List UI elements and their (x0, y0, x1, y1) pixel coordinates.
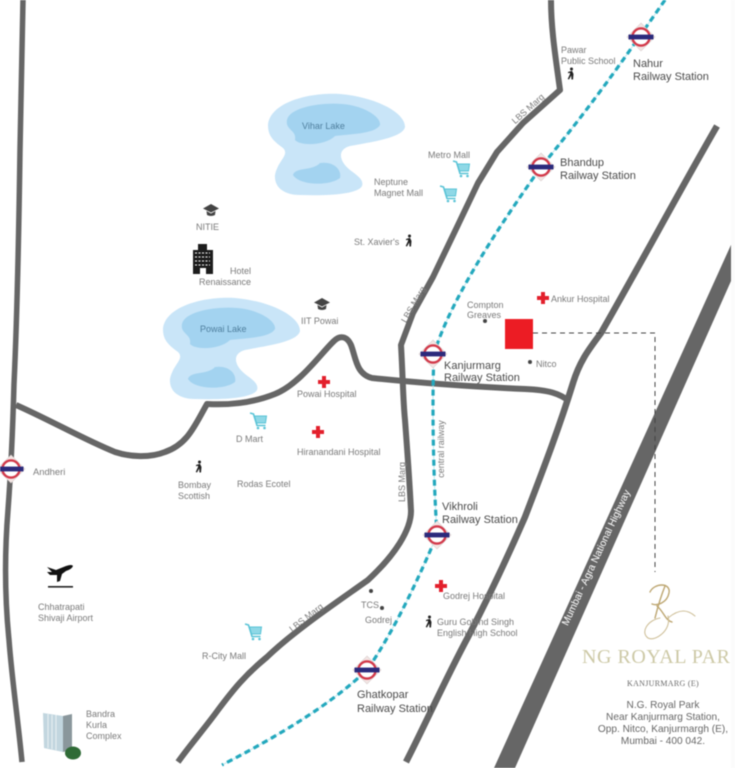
station: Bhandup: Bhandup (560, 157, 604, 169)
landmark: Bombay Scottish (178, 460, 212, 501)
lake label: Powai: Powai Lake (200, 324, 247, 334)
road: LBS Marg (178, 0, 560, 762)
road labels: central railway (436, 420, 446, 478)
project address: Near Kanjurmarg Station, (606, 712, 720, 723)
landmark: Hotel Renaissance: Renaissance (199, 277, 251, 287)
road: eastern link (406, 126, 717, 762)
landmark: R-City Mall: R-City Mall (202, 651, 246, 661)
landmark: St. Xavier's: St. Xavier's (354, 237, 400, 247)
road: Mumbai Agra National Highway (494, 236, 735, 768)
station: Ghatkopar (353, 656, 433, 715)
landmark: Guru Gobind Singh English High School: English High School (437, 628, 518, 638)
landmark: Neptune Magnet Mall: Neptune (374, 177, 408, 187)
landmark: Bandra Kurla Complex: Bandra (86, 709, 115, 719)
station: Andheri: Andheri (33, 466, 65, 477)
project address: Opp. Nitco, Kanjurmargh (E), (598, 724, 728, 735)
dashed pointer to project (533, 333, 655, 572)
landmark: Bandra Kurla Complex (43, 709, 122, 760)
landmark: Godrej: Godrej (365, 615, 392, 625)
landmark: Chhatrapati Shivaji Airport: Chhatrapati (38, 602, 85, 612)
road labels: LBS Marg (399, 285, 428, 324)
landmark: Compton Greaves (467, 300, 504, 323)
station: Kanjurmarg: Railway Station (444, 372, 520, 384)
highway label: Mumbai - Agra National Highway (560, 488, 633, 627)
landmark: Bandra Kurla Complex: Kurla (86, 720, 107, 730)
logo wordmark: NG ROYAL PAR (582, 646, 731, 668)
landmark: Pawar Public School (561, 45, 616, 80)
station: Kanjurmarg: Kanjurmarg (444, 360, 501, 372)
landmark: IIT Powai: IIT Powai (301, 316, 338, 326)
landmark: Godrej Hospital (435, 580, 505, 601)
logo subtitle: KANJURMARG (E) (627, 679, 699, 688)
landmark: Compton Greaves: Compton (467, 300, 504, 310)
landmark: Hiranandani Hospital (297, 426, 381, 457)
railway: central line (222, 0, 665, 765)
landmark: Pawar Public School: Public School (561, 56, 616, 66)
landmark: Bandra Kurla Complex: Complex (86, 731, 122, 741)
landmark: NITIE: NITIE (196, 222, 219, 232)
station: Kanjurmarg (419, 340, 520, 384)
station: Nahur: Railway Station (633, 71, 709, 83)
road: Andheri to Powai link (16, 337, 569, 456)
landmark: Chhatrapati Shivaji Airport: Shivaji Airport (38, 613, 94, 623)
landmark: Chhatrapati Shivaji Airport (38, 565, 94, 623)
landmark: St. Xavier's (354, 234, 412, 247)
road labels: LBS Marg (510, 92, 546, 126)
project site marker (505, 319, 533, 349)
landmark: Hiranandani Hospital: Hiranandani Hospital (297, 447, 381, 457)
landmark: Metro Mall (428, 150, 470, 177)
station: Ghatkopar: Ghatkopar (357, 689, 409, 701)
landmark: Nitco: Nitco (536, 359, 557, 369)
landmark: D Mart: D Mart (236, 434, 263, 444)
landmark: Powai Hospital: Powai Hospital (297, 389, 357, 399)
landmark: Godrej Hospital: Godrej Hospital (443, 591, 505, 601)
logo: NG Royal Park monogram (645, 585, 695, 639)
station: Andheri (0, 455, 65, 483)
landmark: IIT Powai (301, 298, 338, 326)
landmark: R-City Mall (202, 624, 262, 661)
station: Nahur: Nahur (633, 58, 663, 70)
project address: Mumbai - 400 042. (621, 736, 705, 747)
station: Nahur (627, 23, 709, 83)
landmark: Metro Mall: Metro Mall (428, 150, 470, 160)
project address: N.G. Royal Park (627, 700, 700, 711)
landmark: Hotel Renaissance: Hotel (230, 266, 251, 276)
landmark: Neptune Magnet Mall (374, 177, 456, 202)
station: Ghatkopar: Railway Station (357, 703, 433, 715)
landmark: TCS (361, 589, 379, 610)
road: western highway (5, 0, 23, 762)
landmark: Compton Greaves: Greaves (467, 310, 502, 320)
landmark: TCS: TCS (361, 600, 379, 610)
landmark: Guru Gobind Singh English High School: Guru Gobind Singh (437, 617, 514, 627)
station: Vikhroli (423, 501, 518, 549)
station: Bhandup: Railway Station (560, 170, 636, 182)
road labels: LBS Marg (397, 462, 407, 502)
lake: Powai (163, 298, 300, 399)
landmark: Rodas Ecotel: Rodas Ecotel (237, 479, 291, 489)
station: Vikhroli: Vikhroli (442, 501, 478, 513)
lake label: Vihar: Vihar Lake (302, 121, 345, 131)
landmark: Godrej (365, 606, 392, 625)
landmark: Guru Gobind Singh English High School (426, 616, 518, 638)
lake: Vihar (268, 94, 405, 195)
landmark: Pawar Public School: Pawar (561, 45, 587, 55)
landmark: Hotel Renaissance (193, 244, 251, 287)
landmark: Ankur Hospital (537, 292, 610, 304)
landmark: Ankur Hospital: Ankur Hospital (551, 294, 610, 304)
station: Bhandup (527, 153, 636, 182)
landmark: Neptune Magnet Mall: Magnet Mall (374, 188, 423, 198)
station: Vikhroli: Railway Station (442, 514, 518, 526)
road labels: LBS Marg (287, 601, 325, 634)
landmark: D Mart (236, 413, 266, 444)
project address (598, 700, 728, 747)
landmark: Bombay Scottish: Bombay (178, 480, 212, 490)
landmark: Powai Hospital (297, 376, 357, 399)
road labels (287, 92, 546, 634)
landmark: NITIE (196, 204, 219, 232)
landmark: Bombay Scottish: Scottish (178, 491, 210, 501)
